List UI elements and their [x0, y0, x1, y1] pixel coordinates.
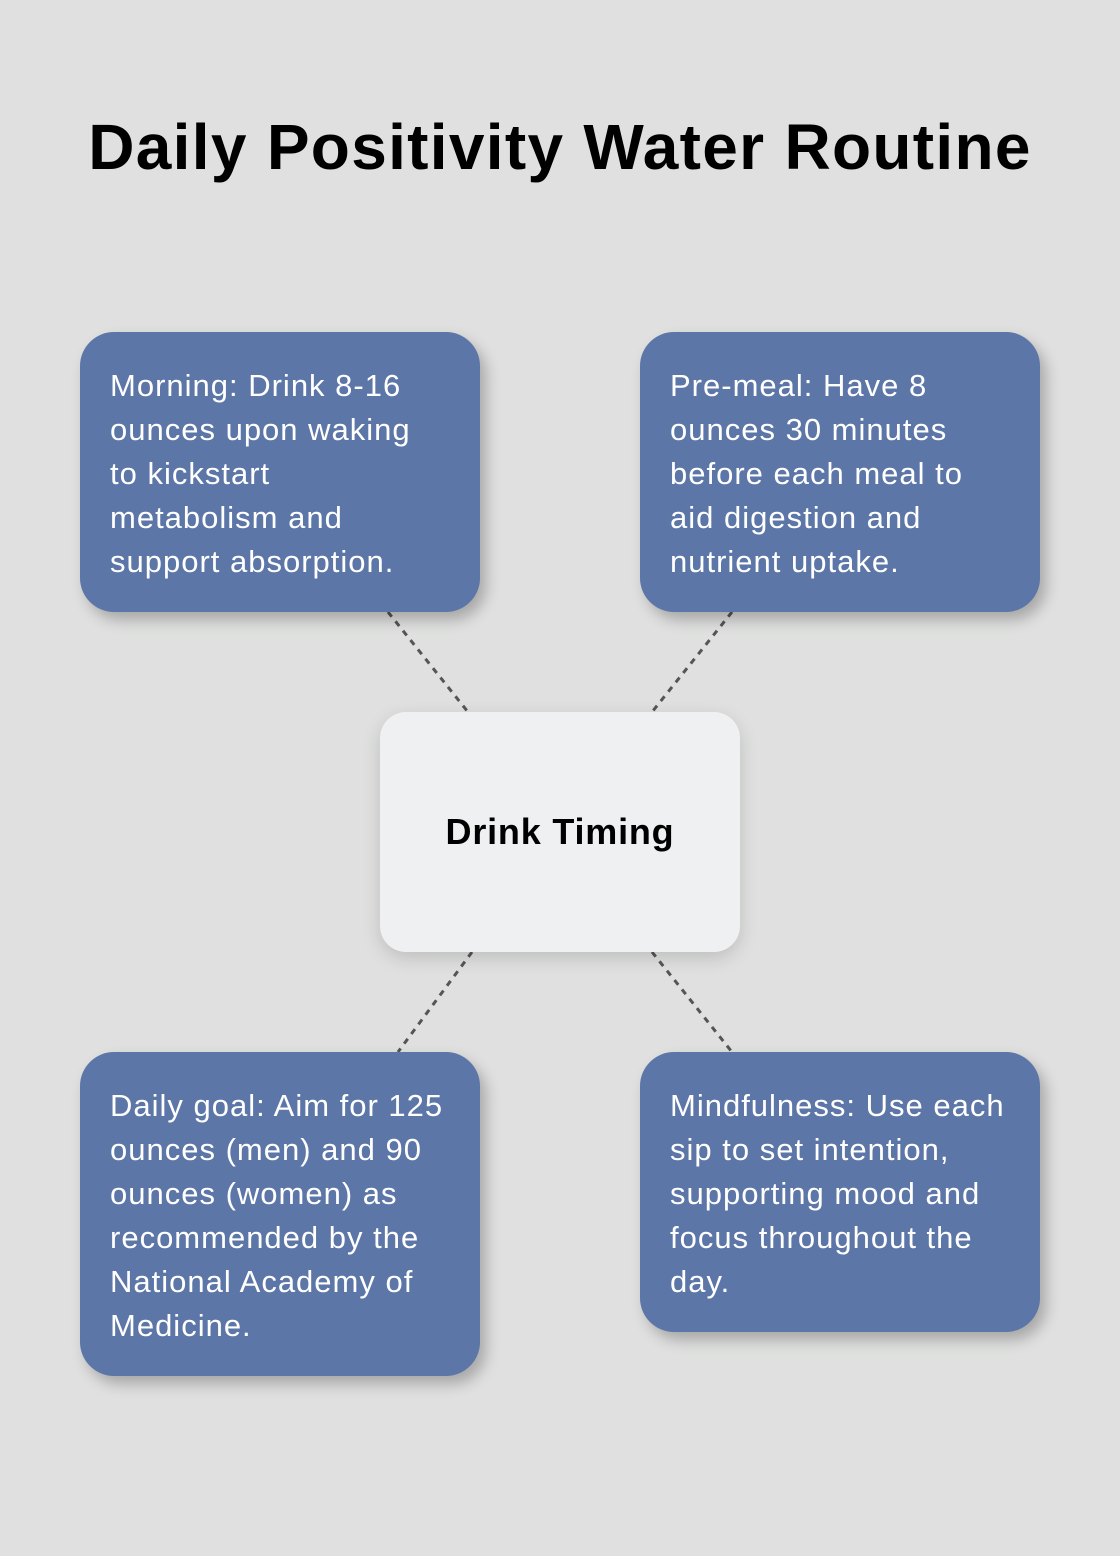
panel: morning: Morning: Drink 8-16: [110, 368, 401, 403]
center node: Drink Timing: [446, 811, 674, 852]
panel: morning: [80, 332, 480, 612]
panel: pre-meal: aid digestion and: [670, 500, 921, 535]
panel: daily goal: ounces (women) as: [110, 1176, 398, 1211]
panel: mindfulness: sip to set intention,: [670, 1132, 950, 1167]
panel: morning: ounces upon waking: [110, 412, 411, 447]
panel: pre-meal: [640, 332, 1040, 612]
panel: mindfulness: day.: [670, 1264, 730, 1299]
panel: morning: support absorption.: [110, 544, 394, 579]
panel: mindfulness: supporting mood and: [670, 1176, 980, 1211]
center node: [380, 712, 740, 952]
panel: daily goal: [80, 1052, 480, 1376]
panel: daily goal: recommended by the: [110, 1220, 419, 1255]
panel: mindfulness: Mindfulness: Use each: [670, 1088, 1005, 1123]
panel: pre-meal: Pre-meal: Have 8: [670, 368, 927, 403]
panel: mindfulness: [640, 1052, 1040, 1332]
panel: pre-meal: ounces 30 minutes: [670, 412, 947, 447]
panel: morning: to kickstart: [110, 456, 270, 491]
panel: pre-meal: before each meal to: [670, 456, 963, 491]
panel: daily goal: Medicine.: [110, 1308, 252, 1343]
panel: daily goal: ounces (men) and 90: [110, 1132, 422, 1167]
panel: pre-meal: nutrient uptake.: [670, 544, 900, 579]
panel: mindfulness: focus throughout the: [670, 1220, 973, 1255]
panel: daily goal: Daily goal: Aim for 125: [110, 1088, 443, 1123]
title: Daily Positivity Water Routine: [88, 111, 1032, 183]
panel: daily goal: National Academy of: [110, 1264, 413, 1299]
panel: morning: metabolism and: [110, 500, 343, 535]
